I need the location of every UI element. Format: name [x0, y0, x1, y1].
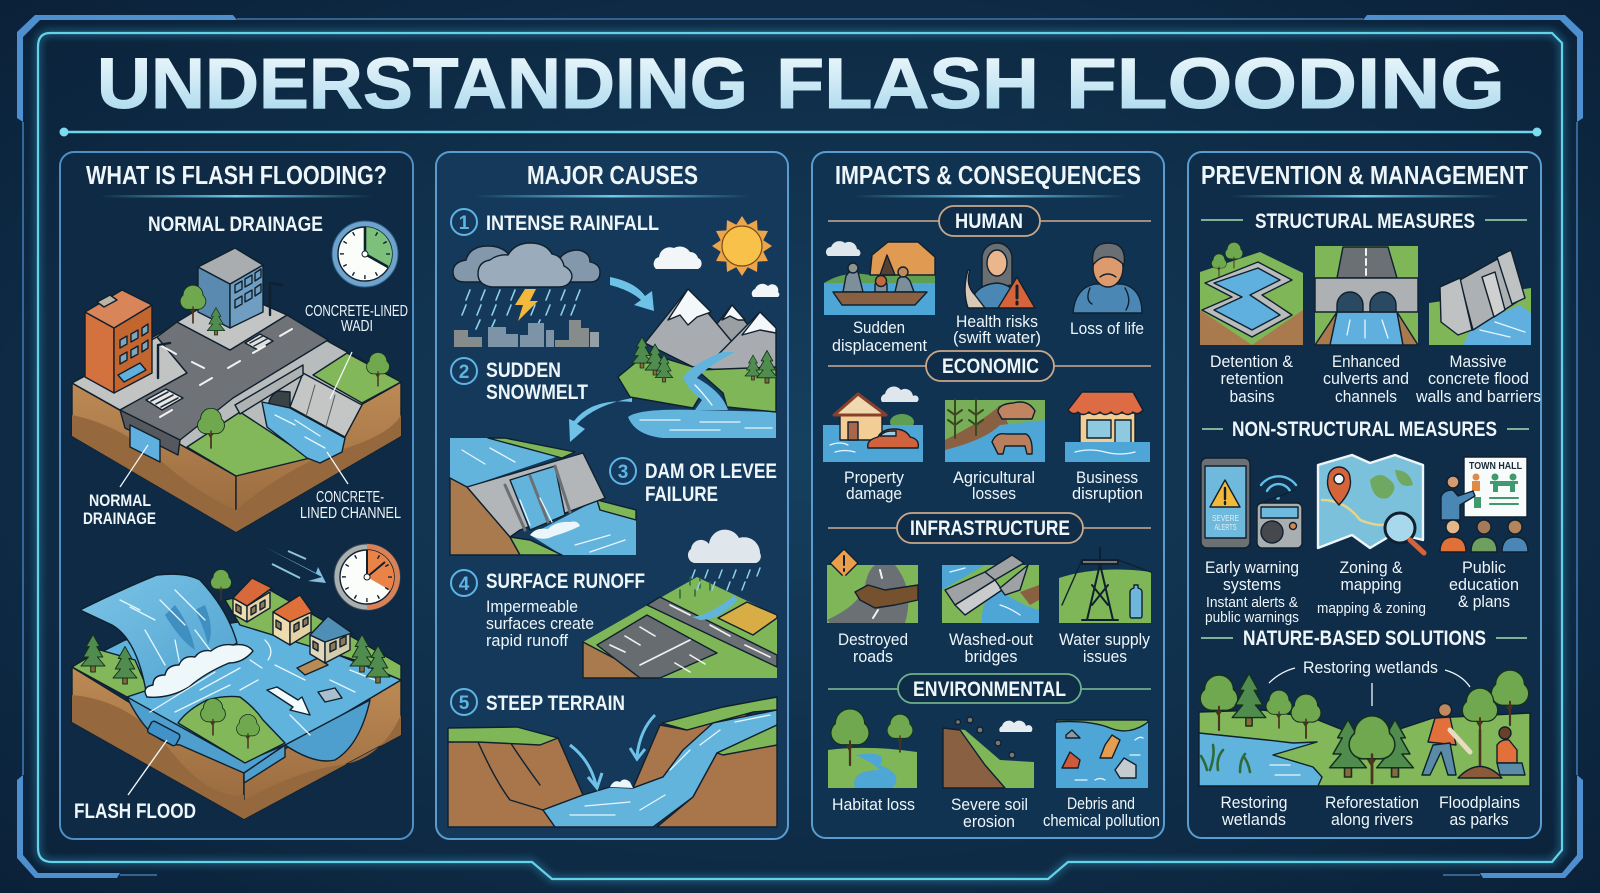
label: public education: education — [1449, 575, 1519, 594]
icon: town hall presentation — [1440, 457, 1528, 552]
cause 1: intense rainfall label — [451, 209, 659, 235]
icon: loss of life — [1073, 243, 1142, 313]
icon: phone alert: SEVERE — [1212, 514, 1239, 523]
label: water supply issues — [1059, 630, 1150, 666]
label: flood walls and barriers: concrete flood — [1428, 369, 1529, 388]
label: agricultural losses — [953, 468, 1035, 503]
label: zoning and mapping — [1317, 558, 1426, 617]
cause 3: dam failure label — [610, 458, 777, 506]
arrows: steep terrain — [570, 715, 655, 788]
icon: agricultural losses — [945, 400, 1045, 462]
label: reforestation along rivers — [1325, 793, 1419, 829]
label: destroyed roads — [838, 630, 908, 666]
cause 1: intense rainfall label: INTENSE RAINFALL — [486, 212, 659, 235]
heading: prevention and management: PREVENTION & MANAGEMENT — [1201, 160, 1528, 190]
label: health risks — [953, 312, 1041, 347]
label: floodplains as parks: as parks — [1450, 810, 1508, 829]
icon: radio with wifi — [1257, 476, 1302, 548]
panel: impacts and consequences — [812, 152, 1164, 838]
illustration: dam failure — [450, 438, 636, 555]
title rule — [60, 128, 1542, 136]
label: debris and chemical pollution: chemical pollution — [1043, 811, 1160, 830]
subheading: nature-based solutions: NATURE-BASED SOLUTIONS — [1243, 627, 1486, 650]
icon: clock normal — [332, 221, 398, 287]
label: normal drainage: DRAINAGE — [83, 509, 156, 528]
icon: habitat loss — [828, 709, 917, 788]
label: culverts and channels: culverts and — [1323, 369, 1409, 388]
label: destroyed roads: Destroyed — [838, 630, 908, 649]
cause 5: steep terrain label — [451, 689, 625, 715]
cause 5: steep terrain label: STEEP TERRAIN — [486, 692, 625, 715]
category: human: HUMAN — [955, 210, 1023, 233]
label: floodplains as parks: Floodplains — [1439, 793, 1520, 812]
cause 5: steep terrain label: 5 — [459, 693, 470, 714]
label: washed-out bridges: bridges — [964, 647, 1018, 666]
arrow: rainfall to snowmelt — [610, 277, 654, 311]
label: flash flood: FLASH FLOOD — [74, 800, 196, 823]
label: detention basins: Detention & — [1210, 352, 1294, 371]
label: severe soil erosion: erosion — [963, 812, 1015, 831]
cause 4: surface runoff label: 4 — [459, 574, 470, 595]
label: early warning systems: public warnings — [1205, 609, 1299, 626]
category: environmental: ENVIRONMENTAL — [913, 678, 1066, 701]
icon: detention basin — [1200, 242, 1303, 345]
icon: severe soil erosion — [943, 717, 1034, 788]
icon: washed-out bridges — [942, 555, 1039, 623]
label: normal drainage: NORMAL — [89, 491, 151, 510]
label: concrete-lined channel: LINED CHANNEL — [300, 505, 401, 522]
cause 2: sudden snowmelt label: SUDDEN — [486, 359, 561, 382]
arrow: snowmelt to dam — [569, 398, 632, 442]
heading: major causes: MAJOR CAUSES — [527, 160, 698, 190]
category: infrastructure: INFRASTRUCTURE — [910, 517, 1070, 540]
panel: prevention and management — [1188, 152, 1541, 838]
label: concrete-lined channel: CONCRETE- — [316, 489, 384, 506]
icon: town hall presentation: TOWN HALL — [1469, 460, 1522, 472]
panel: major causes — [436, 152, 788, 839]
label: detention basins: basins — [1230, 387, 1274, 406]
label: business disruption — [1072, 468, 1143, 503]
cause 3: dam failure label: DAM OR LEVEE — [645, 460, 777, 483]
label: water supply issues: issues — [1083, 647, 1127, 666]
label: destroyed roads: roads — [853, 647, 893, 666]
label: detention basins: retention — [1220, 369, 1284, 388]
label: business disruption: Business — [1076, 468, 1138, 487]
label: water supply issues: Water supply — [1059, 630, 1150, 649]
subheading: non-structural measures: NON-STRUCTURAL MEASURES — [1232, 418, 1497, 441]
label: severe soil erosion — [951, 795, 1028, 831]
cause 2: sudden snowmelt label — [451, 358, 588, 404]
illustration: normal drainage isometric block — [72, 248, 401, 532]
icon: health risks — [965, 243, 1035, 308]
icon: speed arrow — [265, 547, 326, 583]
cause 4: surface runoff label: SURFACE RUNOFF — [486, 570, 645, 593]
label: public education — [1449, 558, 1519, 611]
label: reforestation along rivers: Reforestation — [1325, 793, 1419, 812]
label: reforestation along rivers: along rivers — [1331, 810, 1413, 829]
title: UNDERSTANDING — [97, 45, 748, 124]
illustration: steep terrain — [448, 697, 777, 827]
icon: property damage — [823, 386, 923, 462]
title: FLOODING — [1066, 45, 1505, 124]
cause 2: sudden snowmelt label: 2 — [459, 362, 469, 383]
label: flood walls and barriers: Massive — [1450, 352, 1506, 371]
label: concrete-lined channel — [300, 489, 401, 522]
label: concrete-lined wadi: CONCRETE-LINED — [305, 303, 408, 320]
label: early warning systems: systems — [1223, 575, 1281, 594]
label: culverts and channels — [1323, 352, 1409, 406]
heading: impacts and consequences: IMPACTS & CONSEQUENCES — [835, 160, 1141, 190]
category: economic: ECONOMIC — [942, 355, 1039, 378]
leader lines: normal drainage — [120, 352, 352, 487]
icon: culverts — [1315, 246, 1418, 345]
label: debris and chemical pollution: Debris and — [1067, 794, 1135, 813]
icon: flood walls — [1429, 250, 1531, 345]
label: floodplains as parks — [1439, 793, 1520, 829]
label: detention basins — [1210, 352, 1294, 406]
title — [97, 45, 1505, 124]
cause 4: surface runoff label — [451, 570, 645, 650]
label: zoning and mapping: mapping & zoning — [1317, 600, 1426, 617]
label: property damage: Property — [844, 468, 904, 487]
title: FLASH — [776, 45, 1039, 124]
cause 1: intense rainfall label: 1 — [459, 213, 470, 234]
icon: destroyed roads — [827, 549, 918, 623]
label: normal drainage — [83, 491, 156, 528]
cause 4: surface runoff label: Impermeable — [486, 597, 578, 616]
icon: sun — [712, 216, 772, 276]
category: infrastructure — [828, 513, 1151, 543]
leader line: flash flood — [128, 740, 167, 795]
callout: restoring wetlands — [1269, 658, 1470, 706]
illustration: surface runoff — [583, 530, 777, 678]
label: habitat loss: Habitat loss — [832, 795, 915, 814]
heading: what is flash flooding: WHAT IS FLASH FLOODING? — [86, 160, 387, 190]
category: human — [828, 206, 1151, 236]
label: sudden displacement — [832, 318, 927, 355]
cause 3: dam failure label: 3 — [618, 462, 628, 483]
icon: storm over city — [453, 243, 600, 347]
label: sudden displacement: Sudden — [853, 318, 905, 337]
label: zoning and mapping: mapping — [1340, 575, 1402, 594]
label: debris and chemical pollution — [1043, 794, 1160, 830]
subheading: normal drainage: NORMAL DRAINAGE — [148, 213, 323, 236]
label: agricultural losses: losses — [972, 484, 1016, 503]
label: zoning and mapping: Zoning & — [1340, 558, 1403, 577]
cause 2: sudden snowmelt label: SNOWMELT — [486, 381, 588, 404]
label: early warning systems: Early warning — [1205, 558, 1299, 577]
label: flood walls and barriers: walls and barriers — [1415, 387, 1541, 406]
icon: small clouds — [654, 246, 779, 297]
label: property damage: damage — [846, 484, 902, 503]
panel: what is flash flooding — [60, 152, 413, 839]
callout: restoring wetlands: Restoring wetlands — [1303, 658, 1438, 677]
label: health risks: (swift water) — [953, 328, 1041, 347]
icon: water supply issues — [1059, 548, 1151, 623]
label: early warning systems: Instant alerts & — [1206, 594, 1298, 611]
cause 4: surface runoff label: rapid runoff — [486, 631, 568, 650]
label: sudden displacement: displacement — [832, 336, 927, 355]
icon: sudden displacement — [824, 241, 935, 315]
label: concrete-lined wadi: WADI — [341, 318, 373, 335]
icon: phone alert — [1201, 458, 1250, 548]
illustration: mountains and river — [618, 289, 777, 438]
icon: map with pin — [1318, 455, 1424, 553]
label: public education: & plans — [1458, 592, 1510, 611]
icon: clock flash flood — [334, 544, 400, 610]
label: washed-out bridges — [949, 630, 1033, 666]
label: washed-out bridges: Washed-out — [949, 630, 1033, 649]
label: public education: Public — [1462, 558, 1506, 577]
category: environmental — [828, 674, 1151, 703]
cause 4: surface runoff label: surfaces create — [486, 614, 594, 633]
label: health risks: Health risks — [956, 312, 1038, 331]
icon: business disruption — [1065, 392, 1150, 462]
icon: phone alert: ALERTS — [1214, 523, 1236, 532]
category: economic — [828, 351, 1151, 381]
label: restoring wetlands: wetlands — [1221, 810, 1286, 829]
illustration: nature-based solutions scene — [1199, 670, 1530, 786]
label: property damage — [844, 468, 904, 503]
label: concrete-lined wadi — [305, 303, 408, 335]
cause 3: dam failure label: FAILURE — [645, 483, 718, 506]
label: severe soil erosion: Severe soil — [951, 795, 1028, 814]
label: loss of life: Loss of life — [1070, 319, 1144, 338]
label: restoring wetlands — [1220, 793, 1288, 829]
label: early warning systems — [1205, 558, 1299, 626]
label: culverts and channels: channels — [1335, 387, 1397, 406]
subheading: structural measures: STRUCTURAL MEASURES — [1255, 210, 1475, 233]
illustration: flash flood isometric block — [72, 570, 401, 819]
icon: debris and chemical pollution — [1056, 720, 1148, 788]
label: culverts and channels: Enhanced — [1332, 352, 1400, 371]
label: agricultural losses: Agricultural — [953, 468, 1035, 487]
label: flood walls and barriers — [1415, 352, 1541, 406]
label: restoring wetlands: Restoring — [1220, 793, 1288, 812]
label: business disruption: disruption — [1072, 484, 1143, 503]
